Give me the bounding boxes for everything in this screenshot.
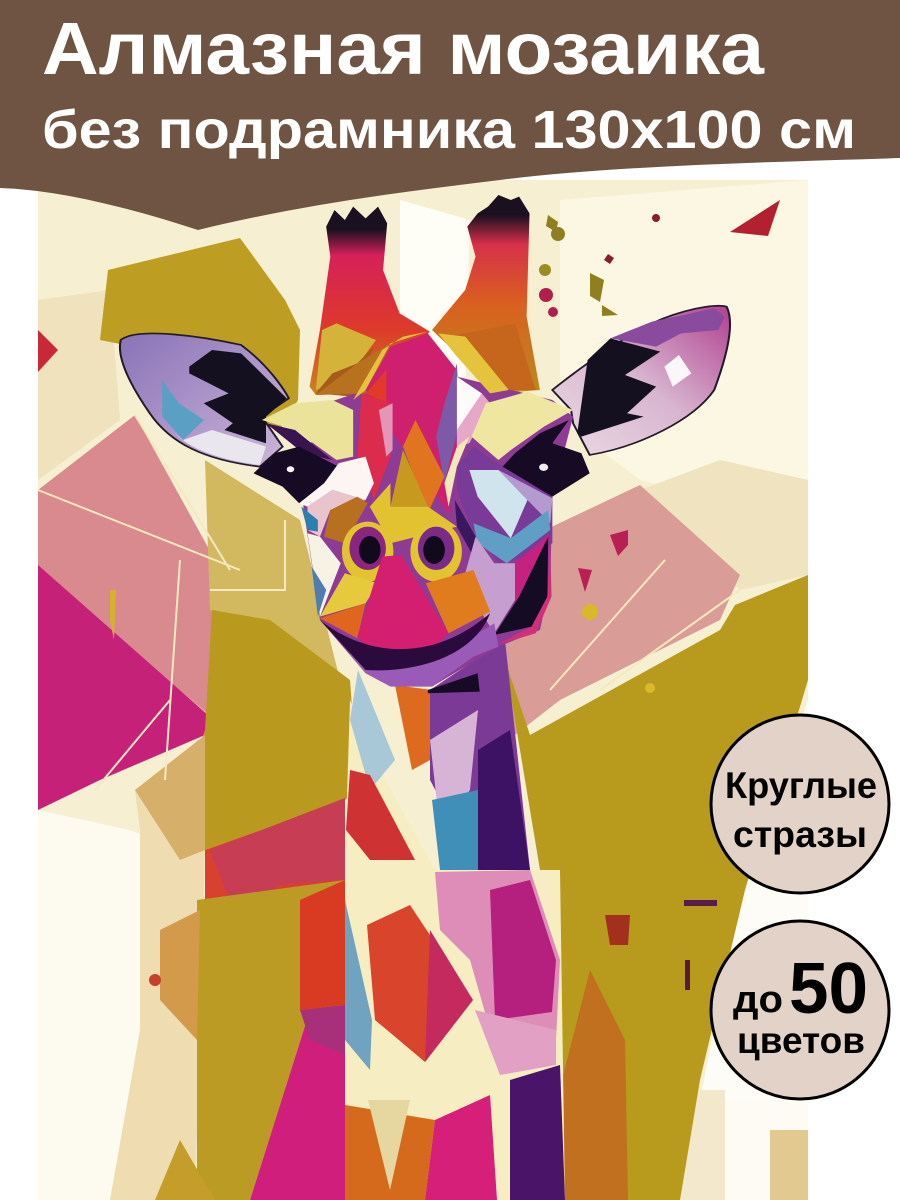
upper neck dark patch	[428, 673, 480, 693]
right eye	[503, 420, 590, 497]
header banner	[0, 0, 900, 230]
left ear: white lower facet	[175, 430, 266, 465]
snout: right nostril	[410, 522, 462, 582]
olive polygon centre left	[205, 460, 340, 680]
badge: round rhinestones: стразы	[733, 814, 867, 855]
scratch lines	[38, 415, 740, 790]
olive polygon bottom left	[197, 880, 345, 1200]
left eye	[254, 423, 339, 503]
neck: dotted cream triangle	[368, 1100, 410, 1190]
neck: pale blue upper stripe	[350, 670, 395, 790]
snout: orange right facet	[426, 570, 490, 633]
orange polygon right bottom	[560, 970, 628, 1200]
right ear	[552, 306, 730, 455]
title line 2: без подрамника 130х100 см	[42, 100, 856, 160]
olive polygon lower left	[175, 610, 358, 850]
neck: cream base	[345, 700, 565, 1200]
left cheek	[299, 457, 374, 617]
neck: pink panel	[435, 870, 560, 1040]
right ear: white facet	[664, 355, 691, 387]
left brow	[262, 400, 353, 460]
face base	[303, 377, 573, 687]
badge: round rhinestones	[711, 715, 889, 893]
pink polygon left	[38, 415, 262, 720]
neck: orange panel	[395, 685, 432, 770]
neck: red panel	[346, 770, 415, 860]
neck: magenta lower	[425, 1095, 497, 1200]
badge: up to 50 colours: до	[733, 979, 783, 1021]
snout: pink nose	[357, 555, 449, 653]
left horn	[310, 207, 430, 397]
magenta polygon left	[38, 565, 208, 810]
neck: blue panel	[432, 790, 478, 870]
olive polygon top left	[100, 238, 300, 430]
neck: blue stripe	[345, 900, 372, 1070]
left ear	[120, 333, 289, 467]
forehead facets	[316, 332, 509, 543]
snout: left nostril	[342, 522, 393, 582]
neck: orange lower	[345, 1105, 435, 1200]
neck: purple panel	[430, 640, 530, 870]
badge: up to 50 colours: цветов	[737, 1020, 865, 1061]
painting: giraffe mosaic picture	[38, 180, 808, 1200]
painting background	[38, 180, 808, 1200]
mouth	[320, 613, 490, 670]
right ear: black inner	[577, 338, 660, 437]
neck: lower pink	[475, 1010, 556, 1075]
splatter marks	[110, 200, 780, 990]
red triangle left edge	[38, 330, 58, 372]
right brow	[471, 392, 573, 460]
right horn	[432, 195, 540, 393]
title line 1: Алмазная мозаика	[42, 7, 765, 90]
neck	[345, 640, 565, 1200]
red polygon lower left	[205, 800, 345, 1010]
left ear: blue facet	[162, 380, 204, 440]
snout: orange left facet	[320, 603, 366, 638]
tan polygon lower left	[135, 735, 205, 860]
neck: dark purple lower	[510, 1065, 565, 1200]
right cheek	[455, 447, 552, 645]
badge: up to 50 colours: 50	[789, 949, 868, 1029]
badge: up to 50 colours	[711, 921, 889, 1099]
pink polygon right	[500, 485, 740, 735]
snout	[320, 522, 498, 687]
olive polygon right large	[505, 575, 808, 1200]
giraffe head	[120, 195, 730, 693]
snout: yellow left facet	[320, 573, 378, 617]
chin	[349, 623, 498, 687]
magenta polygon bottom	[250, 1010, 345, 1200]
left ear: black inner	[189, 350, 287, 443]
neck: red diamond	[367, 905, 473, 1062]
badge: round rhinestones: Круглые	[725, 765, 877, 806]
right ear: purple top facet	[590, 308, 725, 347]
